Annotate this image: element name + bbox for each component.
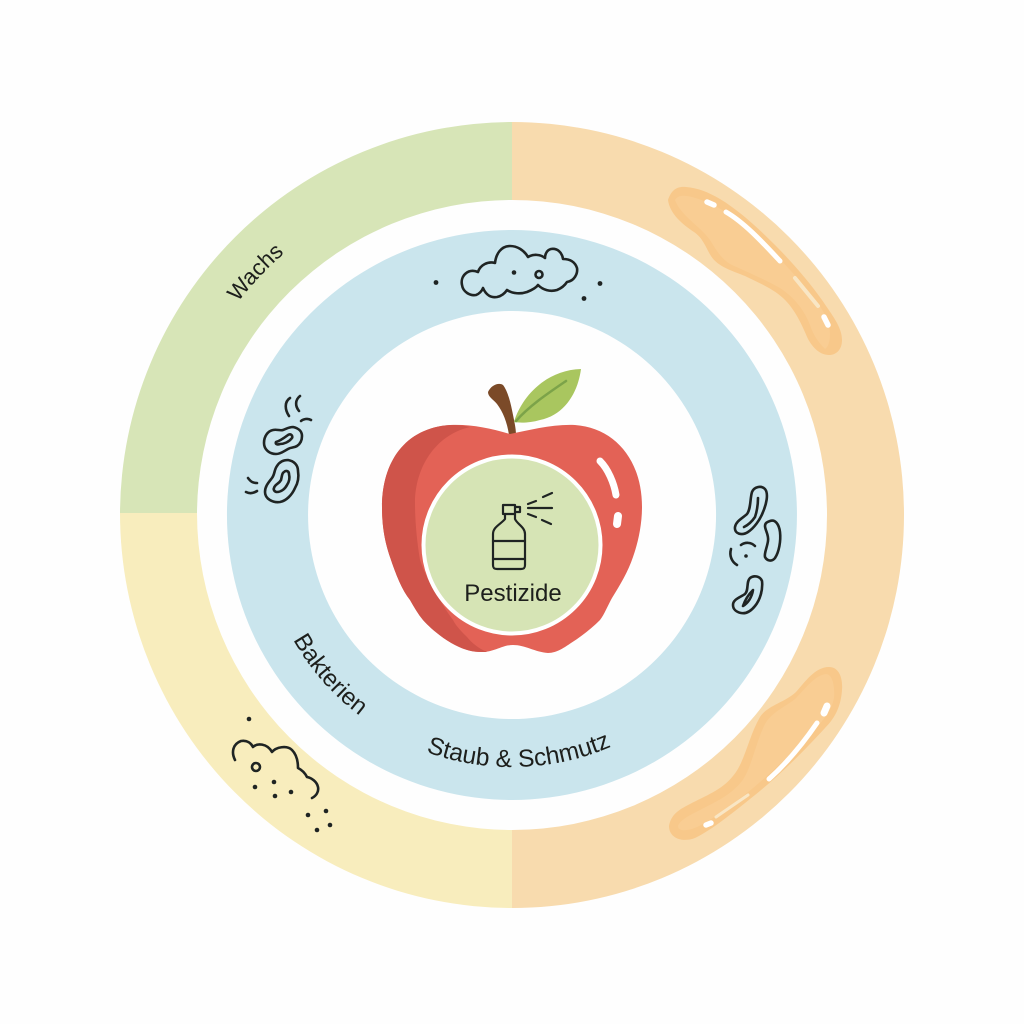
label: Staub & Schmutz: Staub & Schmutz [428, 735, 610, 768]
ring segment: Wachs [120, 122, 512, 513]
cloud outline [462, 246, 577, 297]
drop inner [675, 196, 830, 349]
label: Pestizide: Pestizide [464, 580, 562, 607]
motion lines [286, 398, 290, 416]
dust cloud outline [233, 741, 318, 798]
label: Wachs: Wachs [226, 246, 282, 299]
motion arcs [730, 549, 737, 565]
upper oil drop [668, 187, 842, 355]
shine strokes [707, 202, 828, 325]
drop inner [678, 674, 834, 830]
apple stem [488, 384, 516, 435]
icon: dust cloud [434, 246, 602, 301]
apple shaded side [382, 425, 487, 652]
dust dots [434, 270, 602, 301]
bacterium large [735, 487, 767, 534]
bacterium lower [265, 460, 298, 502]
icon: bacteria left [246, 396, 311, 502]
dust dots [247, 717, 332, 832]
bacterium lower [733, 576, 762, 613]
apple [382, 369, 642, 653]
cloud ring [536, 271, 542, 278]
apple highlights [600, 461, 616, 495]
drop body [669, 667, 842, 840]
lower oil drop [669, 667, 842, 840]
drop body [668, 187, 842, 355]
shine strokes [706, 706, 827, 825]
apple body [382, 425, 642, 653]
dust ring [252, 763, 260, 771]
outer ring [120, 122, 904, 908]
center circle [424, 456, 600, 634]
ring segment: oil film [512, 122, 904, 908]
label: Bakterien: Bakterien [294, 632, 365, 715]
leaf vein [516, 381, 566, 421]
icon: bacteria right [730, 487, 780, 613]
icon: spray bottle [493, 493, 552, 569]
ring segment: dust [120, 513, 512, 908]
bacterium small [765, 521, 780, 561]
apple leaf [514, 369, 581, 423]
inner blue ring [227, 230, 797, 800]
icon: dust on ring [233, 717, 332, 832]
bacterium upper [264, 427, 302, 454]
